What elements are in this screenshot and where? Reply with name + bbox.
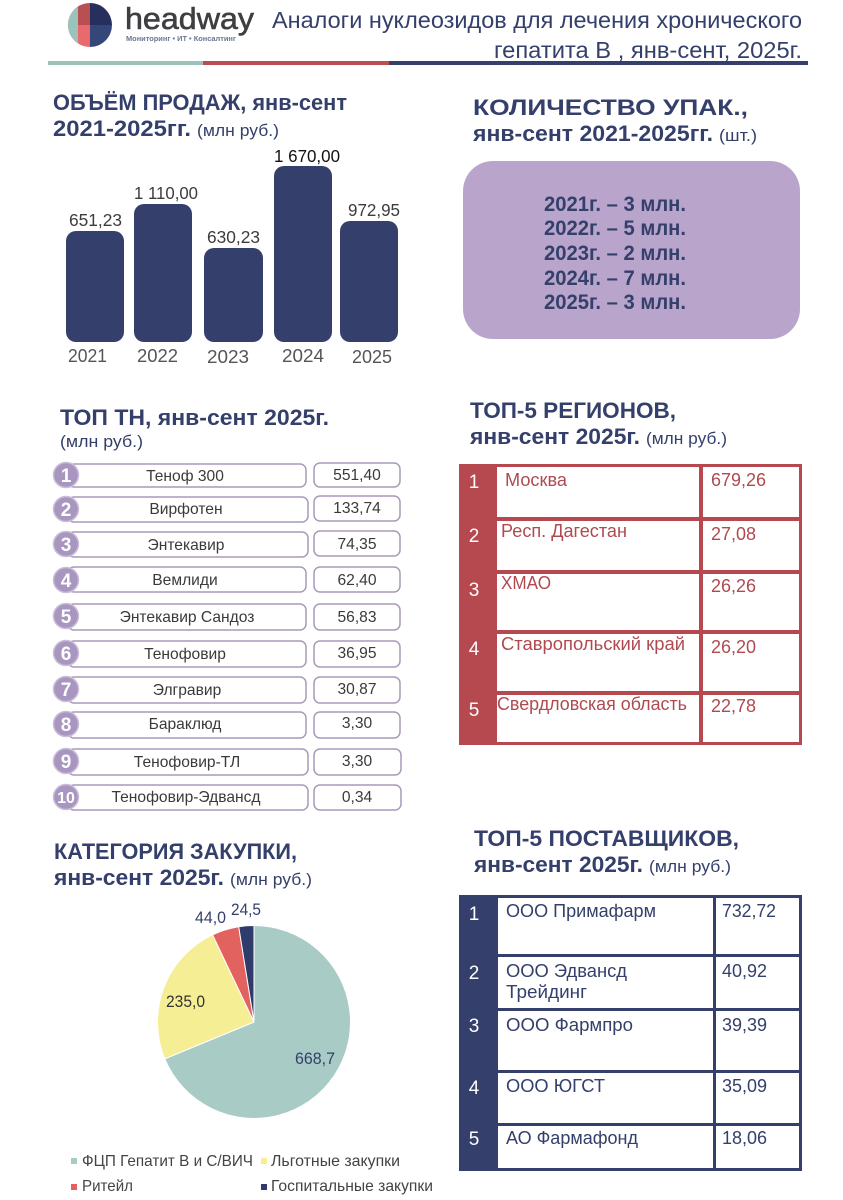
row 3: Энтекавир (148, 537, 225, 554)
row 9: 9 (61, 752, 71, 773)
pie chart (157, 900, 351, 1118)
legend: Ритейл (82, 1178, 133, 1195)
row 8: 8 (61, 715, 71, 736)
row 2: 2 (61, 500, 71, 521)
pie chart: 235,0 (166, 992, 205, 1011)
row 8: 3,30 (342, 715, 372, 732)
heading: top suppliers: янв-сент 2025г. (473, 852, 643, 877)
row 4: 62,40 (337, 572, 377, 589)
panel: top regions (459, 398, 802, 745)
row 10 (54, 784, 401, 810)
legend (71, 1153, 433, 1195)
row 7: 7 (61, 680, 71, 701)
row 9 (54, 748, 401, 775)
table: regions: ХМАО (501, 572, 551, 593)
heading: sales volume: ОБЪЁМ ПРОДАЖ, янв-сент (53, 90, 347, 115)
row 9: Тенофовир-ТЛ (134, 754, 240, 771)
table: regions: 2 (469, 526, 479, 547)
bar chart: 630,23 (207, 227, 260, 247)
row 6: Тенофовир (144, 646, 226, 663)
heading: sales volume (53, 90, 347, 141)
row 6: 36,95 (337, 645, 377, 662)
heading: package count: (шт.) (719, 127, 757, 145)
heading: purchase category: янв-сент 2025г. (53, 865, 224, 890)
row 2 (54, 496, 400, 522)
purple card with package counts (463, 161, 800, 339)
table: regions: Респ. Дагестан (501, 520, 627, 541)
table: regions: Свердловская область (497, 693, 687, 714)
heading: purchase category: (млн руб.) (230, 871, 312, 889)
purple card with package counts: 2023г. – 2 млн. (544, 241, 686, 265)
table: regions: 22,78 (711, 695, 756, 716)
table: regions: 27,08 (711, 523, 756, 544)
table: suppliers: Трейдинг (506, 981, 587, 1002)
bar chart: 1 110,00 (134, 183, 198, 203)
row 9: 3,30 (342, 753, 372, 770)
table: regions: 3 (469, 580, 479, 601)
row 7: Элгравир (153, 682, 222, 699)
heading: purchase category (53, 839, 312, 890)
purple card with package counts: 2025г. – 3 млн. (544, 290, 686, 314)
row 2: Вирфотен (149, 501, 223, 518)
panel: package count (463, 95, 800, 339)
legend: Льготные закупки (271, 1153, 400, 1170)
row 3 (54, 531, 400, 557)
table: suppliers: ООО Фармпро (506, 1014, 633, 1035)
bar chart: 2025 (352, 347, 392, 367)
pie chart: 668,7 (295, 1049, 335, 1068)
row 3: 3 (61, 535, 71, 556)
panel: top trade names (54, 405, 401, 810)
pie chart: 44,0 (195, 908, 226, 927)
legend: ФЦП Гепатит В и С/ВИЧ (82, 1153, 253, 1170)
bar chart: 972,95 (348, 200, 400, 220)
heading: top regions (469, 398, 727, 449)
table: suppliers: 2 (469, 963, 479, 984)
row 6 (54, 640, 400, 667)
heading: package count (472, 95, 757, 146)
row 1: Теноф 300 (146, 468, 224, 485)
pie chart: 24,5 (231, 900, 261, 919)
row 10: 10 (57, 790, 75, 807)
table: suppliers: ООО Примафарм (506, 900, 656, 921)
table: regions: 679,26 (711, 469, 766, 490)
heading: top suppliers: (млн руб.) (649, 858, 731, 876)
table: regions: 4 (469, 639, 480, 660)
row 3: 74,35 (337, 536, 377, 553)
heading: top regions: (млн руб.) (646, 430, 727, 448)
panel: sales volume (53, 90, 400, 367)
header (48, 1, 808, 65)
table: suppliers: 3 (469, 1016, 479, 1037)
table: suppliers: 5 (469, 1129, 479, 1150)
bar chart: 2022 (137, 346, 178, 366)
header tricolour rule (48, 61, 808, 65)
heading: top regions: ТОП-5 РЕГИОНОВ, (470, 398, 676, 423)
legend: Госпитальные закупки (271, 1178, 433, 1195)
purple card with package counts: 2024г. – 7 млн. (544, 266, 686, 290)
heading: package count: янв-сент 2021-2025гг. (472, 121, 713, 146)
title: Аналоги нуклеозидов для лечения хронического (272, 7, 802, 33)
panel: top suppliers (459, 826, 802, 1171)
heading: sales volume: (млн руб.) (197, 122, 279, 140)
table: regions: Москва (505, 469, 568, 490)
table: regions: 26,26 (711, 575, 756, 596)
table: suppliers: 1 (469, 904, 479, 925)
row 10: 0,34 (342, 789, 372, 806)
heading: top suppliers (473, 826, 739, 877)
row 4: Вемлиди (152, 572, 218, 589)
bar chart: 651,23 (69, 210, 122, 230)
heading: purchase category: КАТЕГОРИЯ ЗАКУПКИ, (54, 839, 297, 864)
table: suppliers: 39,39 (722, 1014, 767, 1035)
table: regions: 5 (469, 700, 479, 721)
heading: top suppliers: ТОП-5 ПОСТАВЩИКОВ, (474, 826, 739, 851)
row 6: 6 (61, 644, 71, 665)
table: suppliers (459, 895, 802, 1171)
row 5: Энтекавир Сандоз (120, 609, 254, 626)
row 1: 1 (61, 466, 72, 487)
table: suppliers: ООО ЮГСТ (506, 1075, 605, 1096)
bar chart: 2024 (282, 346, 324, 366)
row 7 (54, 676, 400, 703)
row 10: Тенофовир-Эдвансд (111, 789, 261, 806)
bar chart (66, 146, 400, 367)
logo wordmark: headway (125, 1, 255, 36)
heading: top regions: янв-сент 2025г. (469, 424, 640, 449)
table: regions: Ставропольский край (501, 633, 685, 654)
heading: sales volume: 2021-2025гг. (53, 116, 191, 141)
table: suppliers: ООО Эдвансд (506, 960, 627, 981)
purple card with package counts: 2021г. – 3 млн. (544, 192, 686, 216)
row 1 (54, 462, 400, 488)
row 4 (54, 567, 400, 592)
table: suppliers: 4 (469, 1078, 480, 1099)
title (272, 7, 802, 63)
bar chart: 2021 (68, 346, 107, 366)
title: гепатита В , янв-сент, 2025г. (494, 37, 802, 63)
table: suppliers: 732,72 (722, 900, 776, 921)
panel: purchase category (53, 839, 433, 1195)
table: regions: 1 (469, 472, 479, 493)
heading: package count: КОЛИЧЕСТВО УПАК., (473, 95, 748, 120)
row 5: 5 (61, 607, 72, 628)
table: regions: 26,20 (711, 636, 756, 657)
heading: top trade names: ТОП ТН, янв-сент 2025г. (60, 405, 329, 430)
logo tagline: Мониторинг • ИТ • Консалтинг (126, 34, 236, 43)
row 7: 30,87 (337, 681, 377, 698)
table: regions (459, 464, 802, 745)
row 5: 56,83 (337, 609, 377, 626)
row 1: 551,40 (333, 467, 381, 484)
row 2: 133,74 (333, 500, 381, 517)
bar chart: 2023 (207, 347, 249, 367)
bar chart: 1 670,00 (274, 146, 340, 166)
table: suppliers: 35,09 (722, 1075, 767, 1096)
purple card with package counts: 2022г. – 5 млн. (544, 216, 686, 240)
table: suppliers: 18,06 (722, 1127, 767, 1148)
table: suppliers: АО Фармафонд (506, 1127, 638, 1148)
row 5 (54, 604, 400, 630)
table: suppliers: 40,92 (722, 960, 767, 981)
heading: top trade names (60, 405, 329, 451)
row 4: 4 (61, 571, 72, 592)
icon: headway logo circle (68, 3, 112, 47)
row 8: Бараклюд (149, 716, 221, 733)
row 8 (54, 712, 400, 738)
heading: top trade names: (млн руб.) (60, 433, 143, 451)
